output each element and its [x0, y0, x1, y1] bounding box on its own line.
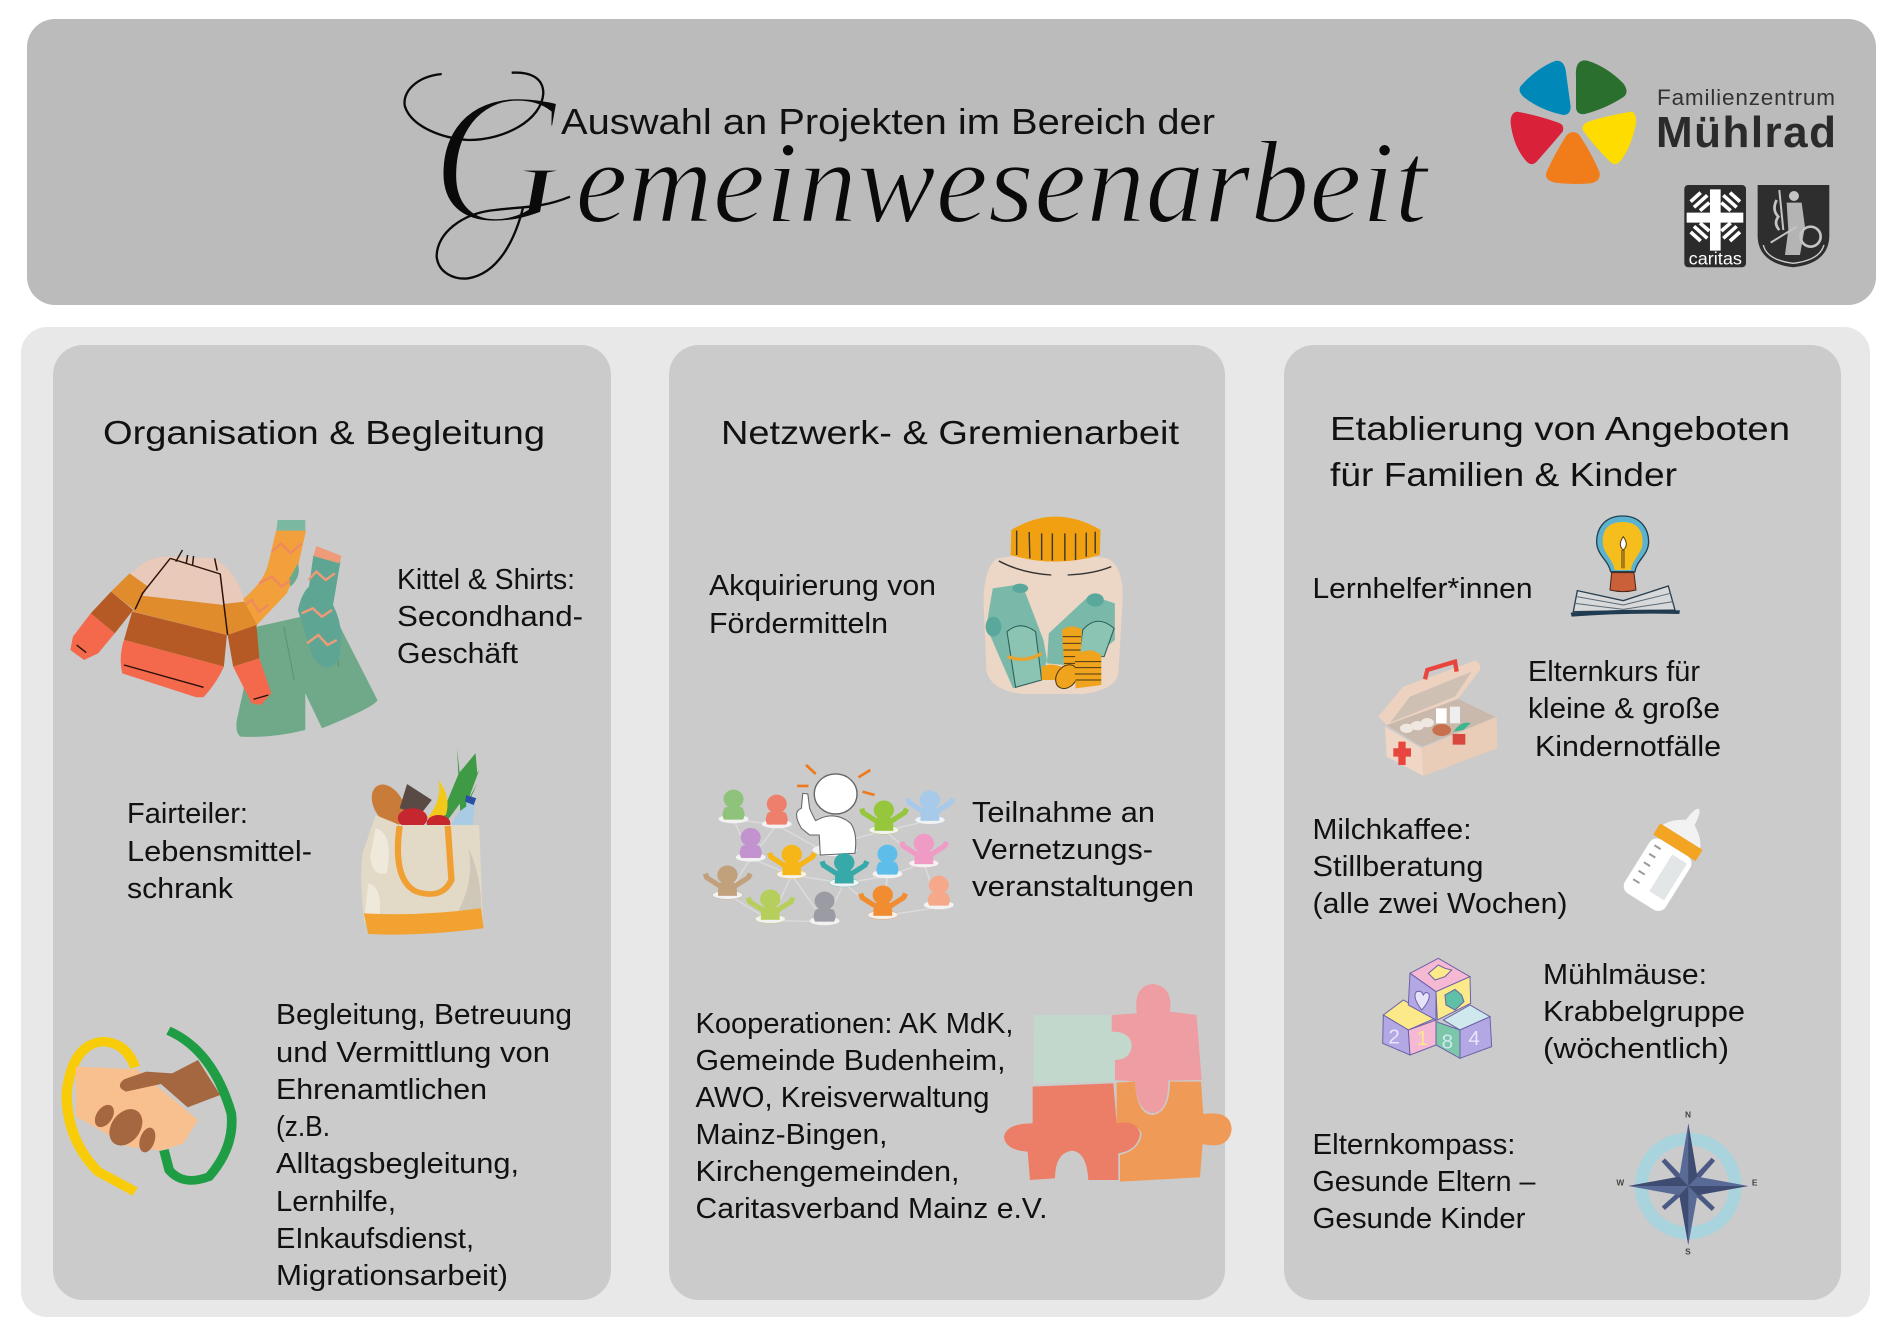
text: Mühlmäuse: (wöchentlich) [1543, 1033, 1729, 1065]
text: Begleitung und Vermittlung: Migrationsarbeit) [276, 1260, 508, 1292]
logo: caritas [1684, 185, 1746, 269]
icon: compass rose [1616, 1110, 1758, 1256]
text: Begleitung und Vermittlung: Ehrenamtlichen [276, 1074, 487, 1106]
header band [27, 19, 1876, 305]
text: Elternkompass: Gesunde Eltern – [1312, 1166, 1536, 1198]
text: Begleitung und Vermittlung: (z.B. [276, 1111, 330, 1143]
text: Elternkompass: Elternkompass: [1312, 1129, 1516, 1161]
text: Elternkurs: Kindernotfälle [1535, 731, 1721, 763]
text: Kooperationen [696, 1008, 1048, 1225]
text: Akquirierung von Fördermitteln: Akquirierung von [709, 570, 936, 602]
text: Akquirierung von Fördermitteln: Fördermitteln [709, 608, 888, 640]
text: Kittel & Shirts: Secondhand- [397, 601, 583, 633]
text: Milchkaffee: Milchkaffee: [1312, 814, 1472, 846]
icon: light bulb on book [1571, 516, 1680, 617]
text: Mühlmäuse: Mühlmäuse: [1543, 959, 1707, 991]
text: Teilnahme an Vernetzungsveranstaltungen: Teilnahme an [972, 797, 1155, 829]
text: Elternkurs [1528, 656, 1721, 763]
text: Milchkaffee [1312, 814, 1568, 920]
text: Kooperationen: Gemeinde Budenheim, [696, 1045, 1006, 1077]
icon: toy blocks [1383, 958, 1492, 1058]
text: Fairteiler: Fairteiler: [127, 798, 248, 830]
text: Elternkompass [1312, 1129, 1536, 1235]
icon: handshake in ring [67, 1031, 232, 1192]
text: Milchkaffee: Stillberatung [1312, 851, 1484, 883]
text: Begleitung und Vermittlung: EInkaufsdienst, [276, 1223, 474, 1255]
text: Begleitung und Vermittlung [276, 999, 572, 1292]
text: Fairteiler: schrank [127, 873, 234, 905]
content background [21, 327, 1870, 1317]
heading: Etablierung von Angeboten für Familien & Kinder: für Familien & Kinder [1330, 456, 1677, 493]
icon: compass rose: W [1616, 1178, 1624, 1188]
text: Kittel & Shirts [397, 564, 583, 670]
text: Teilnahme an Vernetzungsveranstaltungen [972, 797, 1194, 903]
text: Kooperationen: Mainz-Bingen, [696, 1119, 888, 1151]
text: Mühlmäuse [1543, 959, 1745, 1065]
text: Begleitung und Vermittlung: und Vermittlung von [276, 1037, 550, 1069]
text: Akquirierung von Fördermitteln [709, 570, 936, 640]
icon: jar with money [983, 517, 1123, 694]
text: Begleitung und Vermittlung: Begleitung, Betreuung [276, 999, 572, 1031]
icon: compass rose: N [1685, 1110, 1691, 1120]
icon: baby bottle [1620, 796, 1720, 915]
text: Teilnahme an Vernetzungsveranstaltungen: Vernetzungs- [972, 834, 1153, 866]
text: Begleitung und Vermittlung: Lernhilfe, [276, 1186, 396, 1218]
icon: toy blocks: 4 [1468, 1027, 1480, 1050]
logo wordmark [1656, 85, 1836, 157]
text: Fairteiler: Lebensmittel- [127, 836, 312, 868]
text: Lernhelfer*innen: Lernhelfer*innen [1312, 573, 1532, 605]
text: Fairteiler [127, 798, 312, 905]
text: Elternkompass: Gesunde Kinder [1312, 1203, 1526, 1235]
decorative flourish on script title [404, 73, 570, 279]
title: Gemeinwesenarbeit: Gemeinwesenarbeit [430, 54, 1430, 264]
text: Elternkurs: kleine & große [1528, 693, 1720, 725]
heading: Etablierung von Angeboten für Familien & Kinder [1330, 410, 1790, 493]
panel: Etablierung von Angeboten [1284, 345, 1841, 1300]
icon: compass rose: E [1752, 1178, 1758, 1188]
logo: caritas: caritas [1689, 249, 1742, 269]
icon: toy blocks: 1 [1417, 1027, 1428, 1050]
text: Teilnahme an Vernetzungsveranstaltungen: veranstaltungen [972, 871, 1194, 903]
text: Kooperationen: AWO, Kreisverwaltung [696, 1082, 990, 1114]
subtitle: Auswahl an Projekten im Bereich der [561, 101, 1215, 142]
icon: toy blocks: 2 [1388, 1025, 1400, 1048]
text: Elternkurs: Elternkurs für [1528, 656, 1701, 688]
icon: compass rose: S [1685, 1246, 1691, 1256]
icon: network of people [705, 765, 954, 925]
text: Kittel & Shirts: Kittel & Shirts: [397, 564, 575, 596]
text: Kittel & Shirts: Geschäft [397, 638, 518, 670]
heading: Netzwerk- & Gremienarbeit: Netzwerk- & Gremienarbeit [721, 414, 1179, 451]
panel: Netzwerk- & Gremienarbeit [669, 345, 1232, 1300]
panel: Organisation & Begleitung [53, 345, 611, 1300]
icon: shopping bag with groceries [361, 748, 484, 935]
logo wordmark: Mühlrad [1656, 108, 1836, 157]
text: Mühlmäuse: Krabbelgruppe [1543, 996, 1745, 1028]
icon: puzzle pieces [1004, 984, 1232, 1182]
icon: sweater, socks and shorts [70, 520, 377, 737]
icon: five coloured petals [1511, 60, 1636, 184]
text: Kooperationen: Kirchengemeinden, [696, 1156, 960, 1188]
text: Kooperationen: Caritasverband Mainz e.V. [696, 1193, 1048, 1225]
text: Milchkaffee: (alle zwei Wochen) [1312, 888, 1568, 920]
logo: Familienzentrum Mühlrad [1511, 60, 1836, 184]
icon: toy blocks: 8 [1442, 1030, 1453, 1053]
heading: Etablierung von Angeboten für Familien & Kinder: Etablierung von Angeboten [1330, 410, 1790, 447]
logo: municipal coat of arms [1758, 185, 1829, 267]
icon: first aid kit [1378, 661, 1497, 776]
text: Begleitung und Vermittlung: Alltagsbegleitung, [276, 1148, 519, 1180]
heading: Organisation & Begleitung: Organisation & Begleitung [103, 414, 545, 451]
logo wordmark: Familienzentrum [1657, 85, 1835, 110]
text: Kooperationen: Kooperationen: AK MdK, [696, 1008, 1014, 1040]
